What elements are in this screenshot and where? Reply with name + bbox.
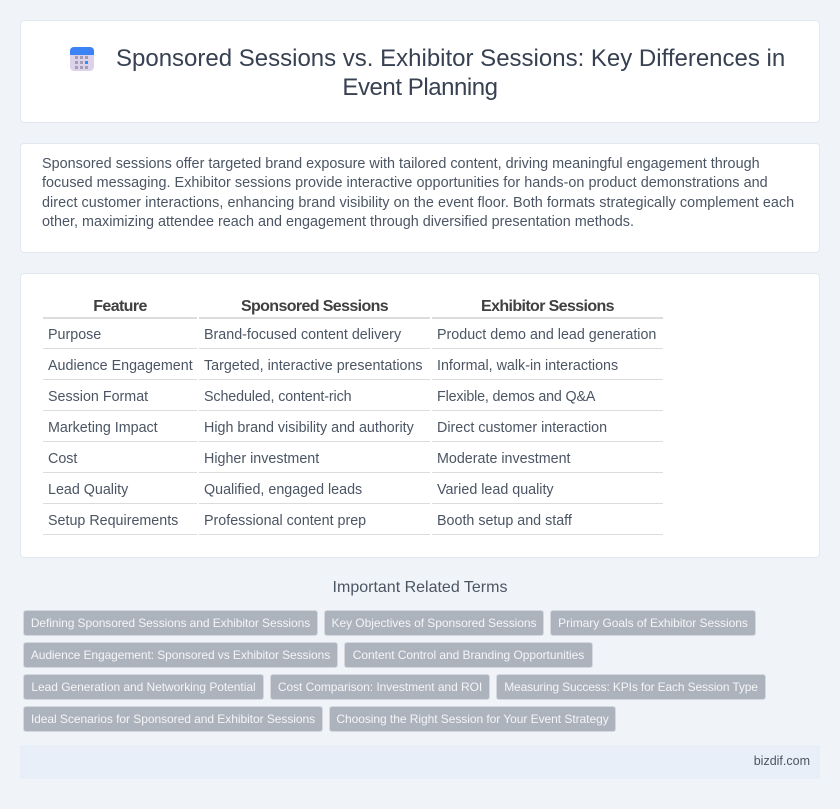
related terms tags: Lead Generation and Networking Potential bbox=[31, 680, 256, 694]
intro text: focused messaging. Exhibitor sessions provide interactive opportunities for hands-on product demonstrations and bbox=[42, 175, 768, 191]
comparison table: Informal, walk-in interactions bbox=[437, 358, 618, 374]
header card: Event Planning bbox=[342, 74, 498, 101]
comparison table: Targeted, interactive presentations bbox=[204, 358, 423, 374]
comparison table: Audience Engagement bbox=[48, 358, 193, 374]
comparison table: Flexible, demos and Q&A bbox=[437, 389, 595, 405]
intro text bbox=[42, 156, 794, 230]
footer source: bizdif.com bbox=[754, 754, 810, 768]
comparison table: Higher investment bbox=[204, 451, 319, 467]
comparison table: Brand-focused content delivery bbox=[204, 327, 401, 343]
comparison table: Qualified, engaged leads bbox=[204, 482, 362, 498]
comparison table bbox=[43, 298, 663, 535]
related terms tags: Key Objectives of Sponsored Sessions bbox=[332, 616, 536, 630]
related terms tags: Audience Engagement: Sponsored vs Exhibitor Sessions bbox=[31, 648, 330, 662]
footer bar bbox=[20, 745, 820, 779]
related terms tags: Defining Sponsored Sessions and Exhibitor Sessions bbox=[31, 616, 310, 630]
comparison table: Professional content prep bbox=[204, 513, 366, 529]
comparison table: Moderate investment bbox=[437, 451, 571, 467]
comparison table: Marketing Impact bbox=[48, 420, 158, 436]
related terms tags: Measuring Success: KPIs for Each Session Type bbox=[504, 680, 758, 694]
intro text: Sponsored sessions offer targeted brand exposure with tailored content, driving meaningful engagement through bbox=[42, 156, 760, 172]
intro card bbox=[20, 143, 820, 253]
comparison table: Purpose bbox=[48, 327, 101, 343]
comparison table: Direct customer interaction bbox=[437, 420, 607, 436]
comparison table: Cost bbox=[48, 451, 77, 467]
intro text: other, maximizing attendee reach and engagement through diversified presentation methods. bbox=[42, 214, 634, 230]
related terms tags: Cost Comparison: Investment and ROI bbox=[278, 680, 482, 694]
related terms tags: Choosing the Right Session for Your Event Strategy bbox=[336, 712, 609, 726]
comparison table: Sponsored Sessions bbox=[241, 298, 388, 315]
comparison table: Exhibitor Sessions bbox=[481, 298, 614, 315]
header card bbox=[20, 20, 820, 123]
comparison table: Lead Quality bbox=[48, 482, 128, 498]
related terms tags: Primary Goals of Exhibitor Sessions bbox=[558, 616, 748, 630]
comparison table: Session Format bbox=[48, 389, 148, 405]
comparison table: Product demo and lead generation bbox=[437, 327, 656, 343]
comparison table: High brand visibility and authority bbox=[204, 420, 414, 436]
title bbox=[116, 45, 785, 101]
comparison table: Varied lead quality bbox=[437, 482, 554, 498]
comparison table: Setup Requirements bbox=[48, 513, 178, 529]
icon: calendar bbox=[70, 47, 94, 71]
comparison table: Scheduled, content-rich bbox=[204, 389, 351, 405]
related terms tags: Content Control and Branding Opportunities bbox=[353, 648, 584, 662]
related terms tags: Ideal Scenarios for Sponsored and Exhibitor Sessions bbox=[31, 712, 315, 726]
table header: Feature bbox=[93, 298, 147, 315]
intro text: direct customer interactions, enhancing brand visibility on the event floor. Both formats strategically complement each bbox=[42, 195, 794, 211]
title: Sponsored Sessions vs. Exhibitor Sessions: Key Differences in bbox=[116, 45, 785, 72]
related terms heading: Important Related Terms bbox=[333, 579, 507, 596]
table card bbox=[20, 273, 820, 558]
related terms tags bbox=[23, 610, 766, 732]
comparison table: Booth setup and staff bbox=[437, 513, 572, 529]
